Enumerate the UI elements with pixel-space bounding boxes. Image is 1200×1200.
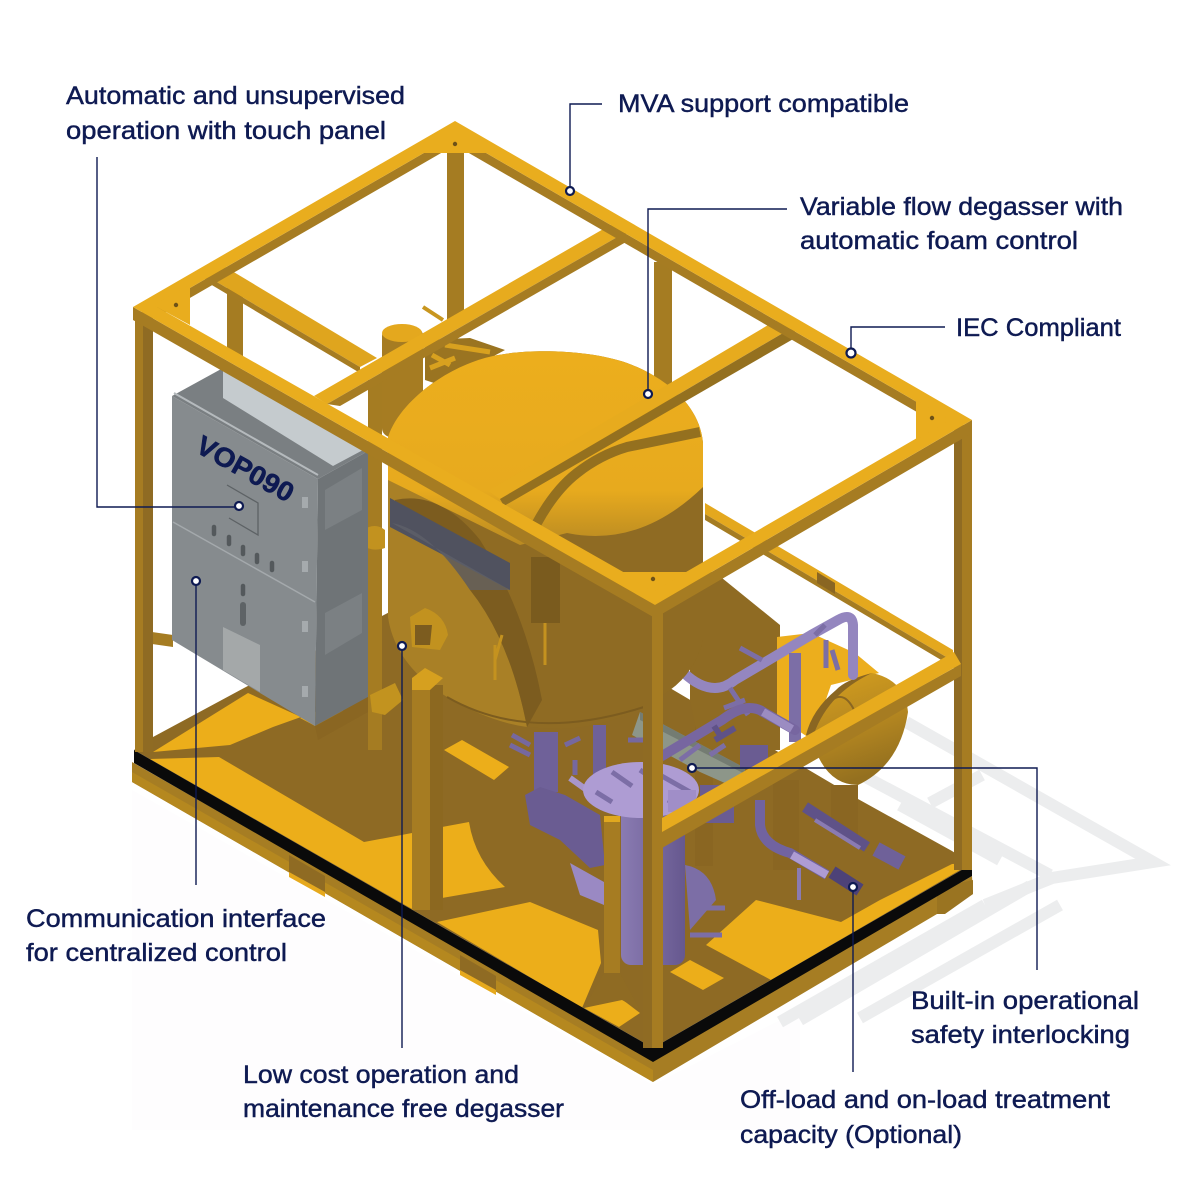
middle pipe <box>662 708 795 756</box>
pump housing <box>525 787 605 868</box>
leader line <box>852 887 854 1072</box>
label: off-load: capacity (Optional) <box>740 1121 962 1149</box>
label: low cost <box>243 642 564 1123</box>
label: MVA support: MVA support compatible <box>618 90 909 118</box>
column fitting <box>531 557 560 623</box>
corner bolts <box>174 142 934 581</box>
cabinet side <box>315 451 368 726</box>
internal legs <box>412 668 640 1010</box>
label: MVA support <box>566 90 909 195</box>
cabinet front <box>172 396 318 726</box>
ground reflection <box>132 790 800 1130</box>
label: off-load: Off-load and on-load treatment <box>740 1086 1110 1114</box>
cabinet bracket <box>315 697 368 740</box>
leader line <box>401 646 403 1048</box>
black stripe <box>134 750 972 1062</box>
label: low cost: maintenance free degasser <box>243 1095 564 1123</box>
label: communication: Communication interface <box>26 905 326 933</box>
label: degasser: automatic foam control <box>800 227 1078 255</box>
shadow swath <box>395 498 542 727</box>
main switch <box>240 605 246 623</box>
leader line <box>195 581 197 885</box>
floor lit patches <box>150 693 972 1027</box>
tank dome <box>388 351 703 545</box>
label: touch panel <box>66 82 405 510</box>
label: communication: for centralized control <box>26 939 287 967</box>
rear tank <box>690 560 908 835</box>
sight band <box>390 498 510 590</box>
manway flange <box>410 608 448 650</box>
main degasser tank <box>363 351 703 729</box>
label: IEC: IEC Compliant <box>956 314 1121 342</box>
front frame <box>133 121 972 1048</box>
label: low cost: Low cost operation and <box>243 1061 519 1089</box>
cross beams <box>205 265 377 367</box>
tank end cap <box>812 673 908 785</box>
display screen <box>227 485 258 535</box>
label: degasser: Variable flow degasser with <box>800 193 1123 221</box>
degasser piping <box>510 617 902 965</box>
rear rail <box>705 503 953 667</box>
vertical pipes <box>534 732 558 792</box>
vent and top fittings <box>382 307 505 437</box>
corner posts <box>135 312 972 1048</box>
rear posts and rails <box>152 150 799 870</box>
rim front sides <box>133 307 972 618</box>
label: touch panel: operation with touch panel <box>66 117 386 145</box>
label: touch panel: Automatic and unsupervised <box>66 82 405 110</box>
leader line <box>648 209 787 394</box>
cabinet top interior <box>172 368 368 479</box>
unit base <box>132 570 973 1082</box>
label: communication <box>26 577 326 967</box>
vent grille <box>223 627 260 692</box>
tank silhouette <box>388 351 703 729</box>
ground shadow of frame <box>780 722 1153 1022</box>
cabinet buttons <box>214 527 272 594</box>
filter vessel lid <box>583 762 699 818</box>
cabinet label: VOP090 <box>191 430 299 508</box>
leader line <box>851 327 945 353</box>
bottom seam <box>447 697 650 723</box>
corner plates <box>153 133 950 592</box>
label: interlocking <box>688 764 1139 1049</box>
label: interlocking: safety interlocking <box>911 1021 1130 1049</box>
lower front rail <box>662 664 961 848</box>
leader line <box>570 104 602 191</box>
leader line <box>692 768 1037 970</box>
left body highlight <box>388 470 527 727</box>
skid <box>132 762 973 1082</box>
floor dark <box>134 570 972 1048</box>
label: interlocking: Built-in operational <box>911 987 1139 1015</box>
lower pipes <box>760 800 827 875</box>
label: off-load <box>740 883 1110 1149</box>
leader line <box>97 157 239 507</box>
latches <box>302 497 308 697</box>
floor details <box>790 870 870 918</box>
label: IEC <box>846 314 1121 358</box>
top rim <box>133 121 972 605</box>
label: degasser <box>644 193 1123 398</box>
side valves <box>363 526 385 550</box>
upper pipe <box>664 617 853 688</box>
control cabinet <box>172 368 368 740</box>
gray rail <box>632 712 745 792</box>
hatch arc <box>537 432 700 523</box>
filter vessel body <box>621 805 685 965</box>
skid feet <box>289 855 973 995</box>
rim inner sides <box>157 135 948 430</box>
